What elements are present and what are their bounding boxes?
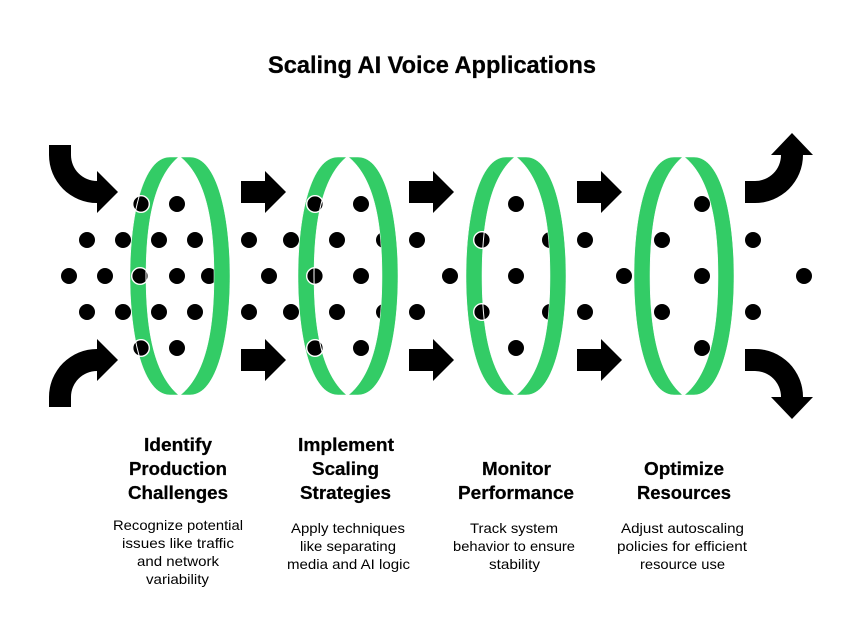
step 2 heading: Implement (298, 435, 394, 455)
step 2 heading: Strategies (300, 483, 391, 503)
icon: curved arrow into funnel, top left (49, 145, 118, 213)
icon: curved arrow into funnel, bottom left (49, 339, 118, 407)
icon: curved arrow out, bottom right (745, 349, 813, 419)
step 3 description (453, 520, 575, 572)
ring 1: identify (130, 157, 230, 395)
straight arrows between stages (241, 171, 622, 381)
ring edge lines crossing the outlined dots (136, 196, 485, 356)
step 1 description: and network (137, 553, 220, 569)
step 3 heading (458, 459, 574, 503)
step 1 heading: Identify (144, 435, 212, 455)
step 4 description: resource use (640, 556, 725, 572)
step 2 heading: Scaling (312, 459, 379, 479)
step 2 heading (298, 435, 394, 503)
ring 3: monitor (466, 157, 566, 395)
step 2 description: media and AI logic (287, 556, 410, 572)
step 2 description: Apply techniques (291, 520, 405, 536)
step 1 description: Recognize potential (113, 517, 243, 533)
icon: curved arrow out, top right (745, 133, 813, 203)
step 1 heading (128, 435, 228, 503)
particle dots flowing through the rings (61, 196, 812, 356)
ring 4: optimize (634, 157, 734, 395)
step 3 heading: Monitor (482, 459, 551, 479)
step 1 description (113, 517, 243, 587)
step 1 heading: Production (129, 459, 227, 479)
white-outlined dots caught on the rings (132, 196, 490, 356)
step 4 heading (637, 459, 731, 503)
step 3 heading: Performance (458, 483, 574, 503)
step 1 description: variability (146, 571, 209, 587)
step 4 heading: Optimize (644, 459, 724, 479)
step 4 heading: Resources (637, 483, 731, 503)
step 4 description: Adjust autoscaling (621, 520, 744, 536)
step 1 description: issues like traffic (122, 535, 234, 551)
step 3 description: stability (489, 556, 540, 572)
step 2 description (287, 520, 410, 572)
step 3 description: behavior to ensure (453, 538, 575, 554)
ring 2: implement (298, 157, 398, 395)
title: Scaling AI Voice Applications (268, 52, 596, 79)
step 4 description (617, 520, 747, 572)
step 2 description: like separating (300, 538, 396, 554)
step 1 heading: Challenges (128, 483, 228, 503)
step 4 description: policies for efficient (617, 538, 747, 554)
step 3 description: Track system (470, 520, 558, 536)
